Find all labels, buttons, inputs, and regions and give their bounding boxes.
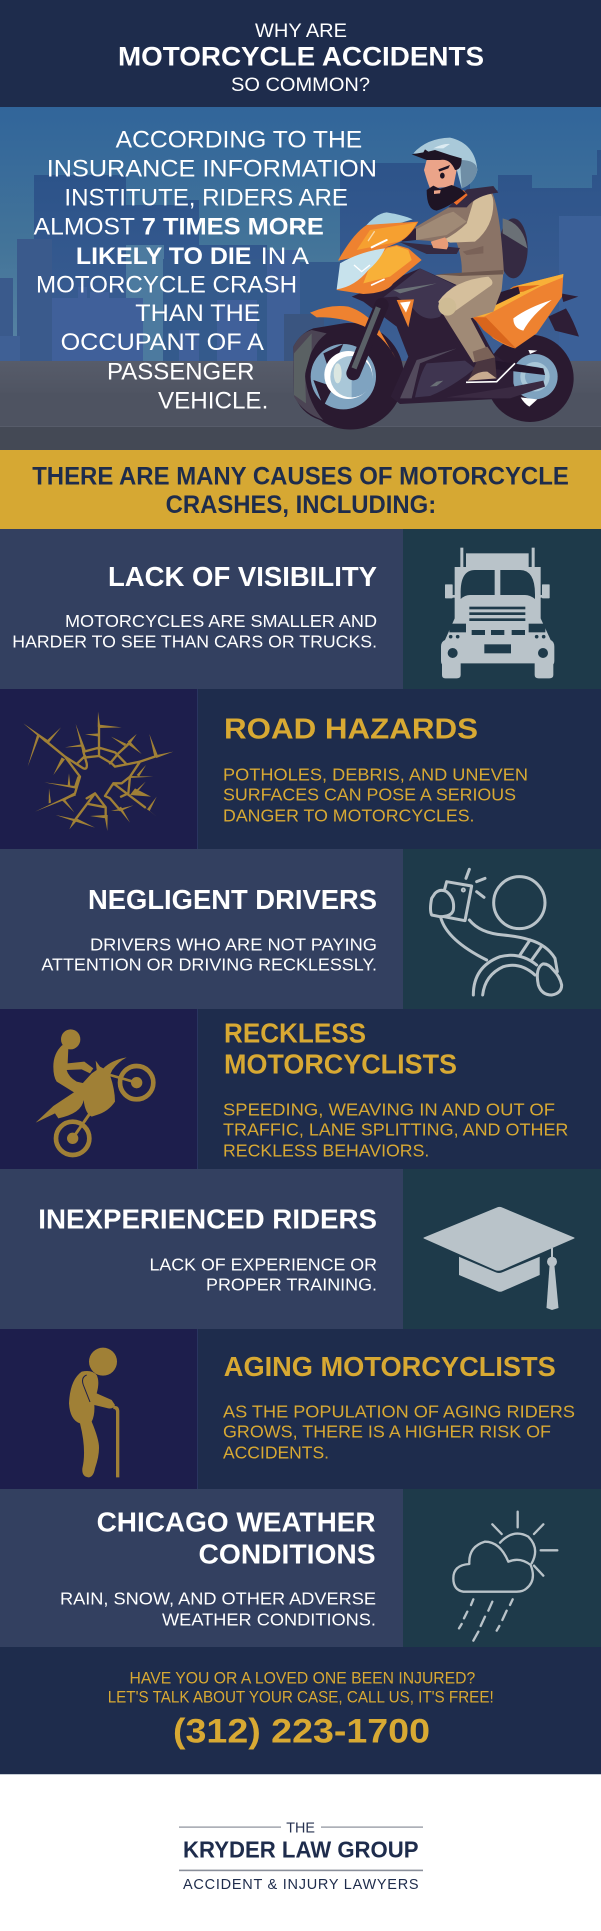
front fork [353, 305, 382, 373]
heading: chicago weather conditions: CHICAGO WEATHER [97, 1507, 376, 1538]
description: LACK OF EXPERIENCE OR [150, 1254, 377, 1274]
description: DRIVERS WHO ARE NOT PAYING [90, 934, 377, 954]
description: HARDER TO SEE THAN CARS OR TRUCKS. [12, 631, 377, 651]
heading: chicago weather conditions [97, 1507, 376, 1569]
heading: negligent drivers: NEGLIGENT DRIVERS [88, 884, 377, 915]
heading: chicago weather conditions: CONDITIONS [198, 1538, 376, 1569]
statistic text block: VEHICLE. [158, 387, 268, 414]
description [12, 611, 377, 651]
illustration: motorcycle rider [293, 138, 579, 430]
heading: reckless motorcyclists: RECKLESS [224, 1018, 366, 1049]
tail fairing [468, 274, 579, 348]
front fairing and windshield [337, 212, 422, 294]
call to action text: HAVE YOU OR A LOVED ONE BEEN INJURED? [130, 1668, 475, 1687]
statistic text block: INSURANCE INFORMATION [47, 156, 377, 182]
exhaust highlight [466, 363, 515, 382]
phone number: (312) 223-1700 [173, 1712, 430, 1750]
logo text: ACCIDENT & INJURY LAWYERS [183, 1877, 419, 1893]
statistic text block: 7 TIMES MORE [142, 214, 324, 240]
panel: negligent drivers [0, 849, 601, 1009]
description: TRAFFIC, LANE SPLITTING, AND OTHER [223, 1119, 568, 1139]
statistic text block: THAN THE [135, 300, 261, 327]
description: AS THE POPULATION OF AGING RIDERS [223, 1401, 575, 1421]
heading: reckless motorcyclists: MOTORCYCLISTS [224, 1049, 457, 1080]
description: DANGER TO MOTORCYCLES. [223, 805, 474, 825]
icon: driver taking selfie at wheel [430, 869, 562, 995]
description [60, 1588, 376, 1629]
heading: lack of visibility: LACK OF VISIBILITY [108, 561, 377, 592]
heading: reckless motorcyclists [224, 1018, 457, 1080]
logo text [183, 1821, 419, 1893]
panel: law firm logo footer [0, 1775, 601, 1931]
statistic text block: MOTORCYCLE CRASH [36, 271, 297, 298]
title line: so common: SO COMMON? [231, 74, 370, 96]
description [41, 934, 377, 974]
statistic text block: OCCUPANT OF A [61, 329, 264, 356]
front wheel [293, 323, 404, 430]
description: ATTENTION OR DRIVING RECKLESSLY. [41, 954, 377, 974]
panel: chicago weather conditions [0, 1489, 601, 1647]
title line: why are: WHY ARE [255, 20, 347, 42]
heading: aging motorcyclists: AGING MOTORCYCLISTS [224, 1351, 556, 1382]
description: SURFACES CAN POSE A SERIOUS [223, 784, 516, 804]
description: WEATHER CONDITIONS. [162, 1609, 376, 1629]
description: ACCIDENTS. [223, 1442, 329, 1462]
description: RAIN, SNOW, AND OTHER ADVERSE [60, 1588, 376, 1608]
engine and frame [352, 268, 545, 404]
city skyline background [0, 150, 601, 361]
rear wheel [486, 335, 574, 422]
statistic text block [34, 127, 377, 414]
panel: hero with statistic and motorcycle rider [0, 107, 601, 450]
icon: cracked surface [23, 712, 173, 831]
statistic text block: ACCORDING TO THE [116, 127, 362, 154]
description: POTHOLES, DEBRIS, AND UNEVEN [223, 764, 528, 784]
panel: inexperienced riders [0, 1169, 601, 1329]
handlebar and hand [399, 237, 460, 254]
icon: graduation cap [424, 1207, 574, 1310]
heading: inexperienced riders: INEXPERIENCED RIDERS [38, 1204, 377, 1235]
description [223, 1401, 575, 1462]
icon: elderly person with cane [69, 1348, 119, 1477]
description [223, 1099, 568, 1160]
description: PROPER TRAINING. [206, 1274, 377, 1294]
panel: gold section heading [0, 450, 601, 529]
panel: title header [0, 0, 601, 107]
description: GROWS, THERE IS A HIGHER RISK OF [223, 1421, 551, 1441]
panel: reckless motorcyclists [0, 1009, 601, 1169]
rider torso and legs [402, 186, 504, 381]
call to action text [108, 1668, 494, 1706]
icon: motorcyclist doing wheelie [36, 1029, 153, 1155]
description [150, 1254, 377, 1294]
panel: road hazards [0, 689, 601, 849]
logo text: KRYDER LAW GROUP [183, 1836, 419, 1862]
description: RECKLESS BEHAVIORS. [223, 1140, 429, 1160]
icon: truck front [441, 548, 554, 678]
description: MOTORCYCLES ARE SMALLER AND [65, 611, 377, 631]
panel: lack of visibility [0, 529, 601, 689]
heading: road hazards: ROAD HAZARDS [224, 713, 478, 745]
front fender [310, 306, 396, 358]
statistic text block: LIKELY TO DIE [76, 243, 251, 270]
description: SPEEDING, WEAVING IN AND OUT OF [223, 1099, 555, 1119]
panel: call to action [0, 1647, 601, 1775]
panel: gold section heading: THERE ARE MANY CAUSES OF MOTORCYCLE [32, 462, 569, 490]
rider head and helmet [412, 138, 477, 211]
description [223, 764, 528, 825]
title line: motorcycle accidents: MOTORCYCLE ACCIDENTS [118, 42, 484, 72]
logo text: THE [286, 1821, 315, 1837]
call to action text: LET'S TALK ABOUT YOUR CASE, CALL US, IT'S FREE! [108, 1687, 494, 1706]
statistic text block: INSTITUTE, RIDERS ARE [64, 184, 348, 212]
road [0, 361, 601, 450]
icon: rain cloud and sun [453, 1512, 557, 1641]
statistic text block: IN A [261, 243, 309, 270]
panel: aging motorcyclists [0, 1329, 601, 1489]
backpack [499, 218, 528, 278]
logo rules [179, 1826, 423, 1871]
statistic text block: ALMOST [34, 214, 135, 240]
panel: gold section heading: CRASHES, INCLUDING: [166, 491, 436, 519]
statistic text block: PASSENGER [107, 358, 254, 385]
